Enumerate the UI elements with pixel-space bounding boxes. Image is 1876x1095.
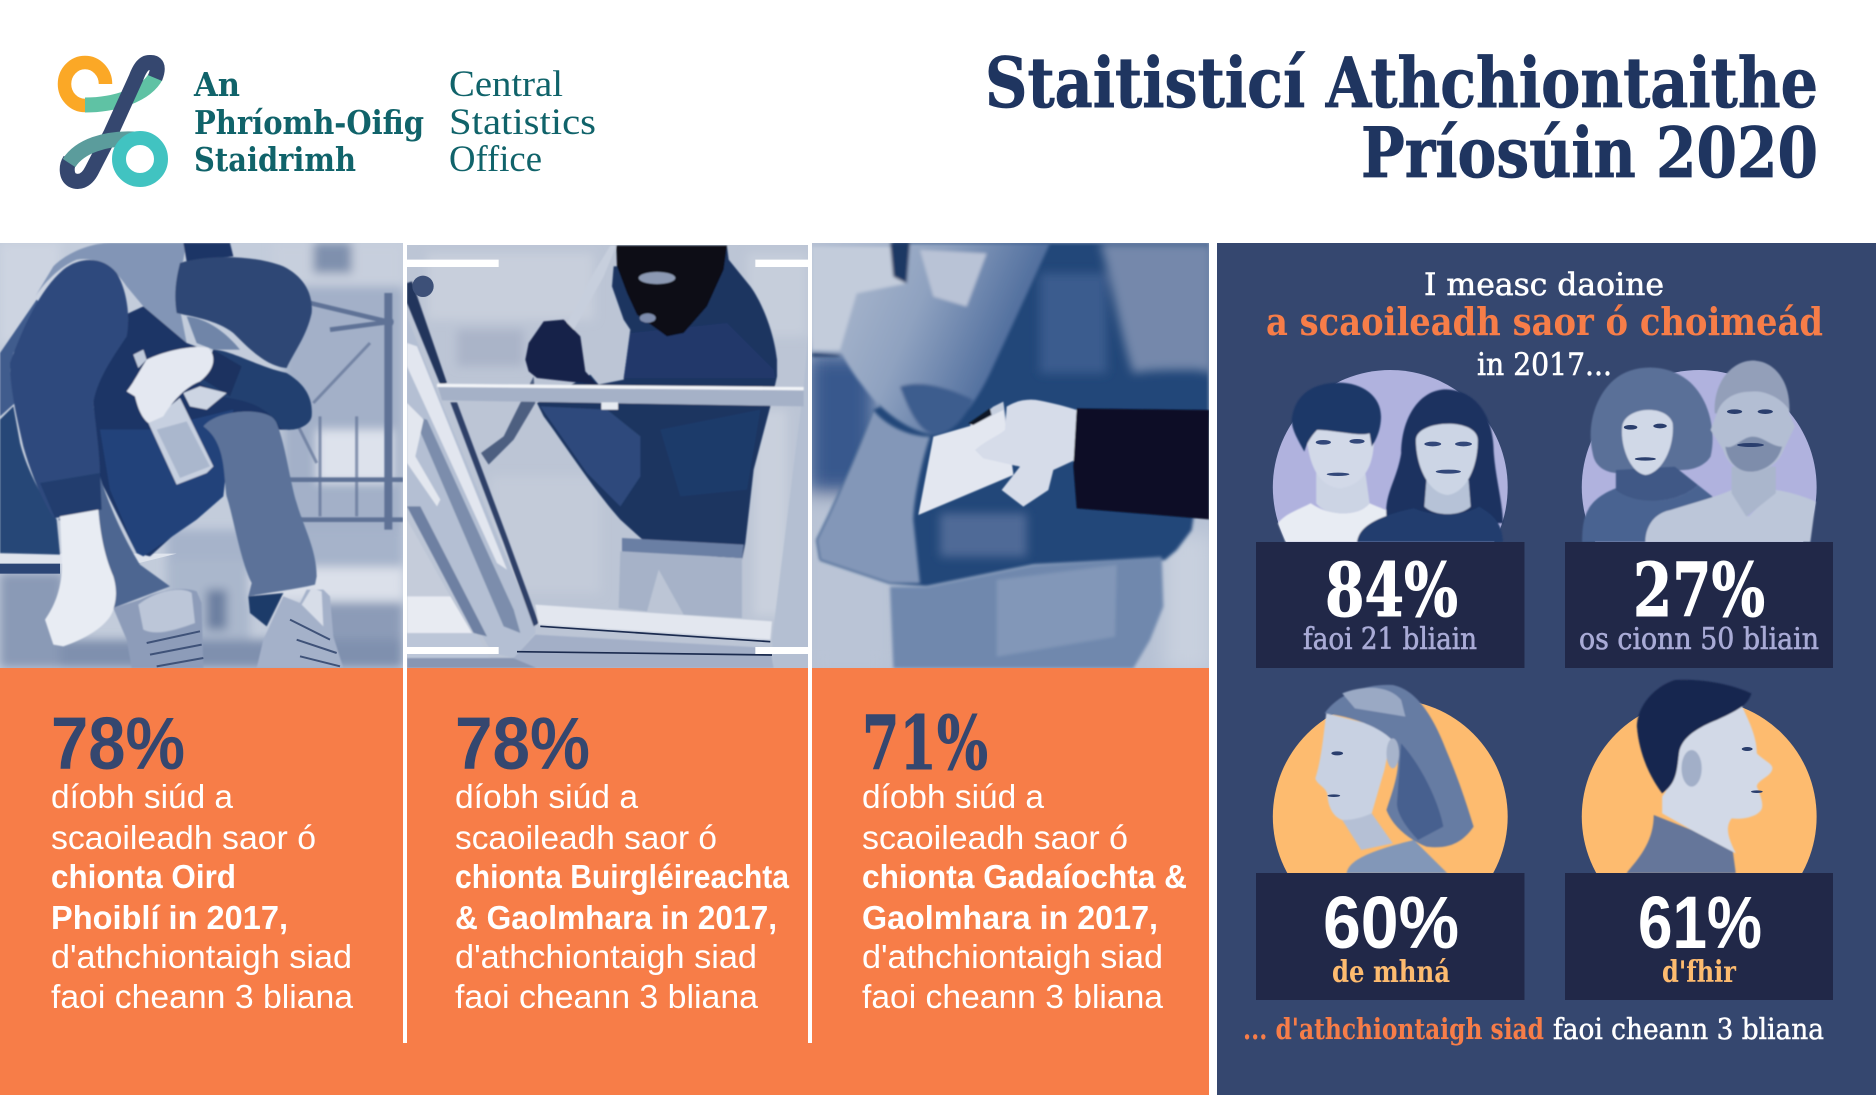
panel heading: a scaoileadh saor ó choimeád [1266,299,1823,344]
panel text: theft offences [862,701,1187,1015]
stat box: under 21: faoi 21 bliain [1303,622,1477,657]
white bars [407,260,810,654]
panel text: public order offences [51,702,354,1015]
logo text: Irish name: Phríomh-Oifig [194,103,424,142]
stat box: men: d'fhir [1662,955,1737,990]
stat box: over 50: 27% [1633,548,1765,634]
panel heading [1266,267,1823,383]
panel text: theft offences: 71% [862,701,988,787]
panel text: burglary offences: scaoileadh saor ó [455,819,717,856]
panel heading: in 2017... [1477,347,1612,383]
panel text: public order offences: d'athchiontaigh siad [51,938,352,975]
panel text: public order offences: faoi cheann 3 bliana [51,978,354,1015]
stat box: women: 60% [1323,881,1459,964]
stat box: men [1565,873,1833,1000]
stat box: men: 61% [1638,881,1762,964]
panel: orange statistics background [0,668,1209,1095]
panel text: public order offences: Phoiblí in 2017, [51,899,288,936]
panel text: theft offences: Gaolmhara in 2017, [862,899,1158,936]
photo: hooded person sitting with a bottle [0,243,403,668]
title [985,43,1818,194]
closing line: ... d'athchiontaigh siad [1243,1012,1544,1046]
logo text: English name: Central [449,64,563,105]
panel text: burglary offences: díobh siúd a [455,778,639,815]
portrait: older woman and older man [1582,361,1817,605]
panel text: theft offences: d'athchiontaigh siad [862,938,1163,975]
portrait: young man and young woman [1273,370,1508,605]
logo: Central Statistics Office [64,62,596,181]
divider lines [405,668,810,1043]
logo text: Irish name: Staidrimh [194,140,356,179]
stat box: over 50: os cionn 50 bliain [1579,622,1819,657]
panel text: public order offences: scaoileadh saor ó [51,819,316,856]
panel text: burglary offences: faoi cheann 3 bliana [455,978,759,1015]
panel text: public order offences: 78% [51,702,185,785]
portrait: woman in profile [1273,685,1508,934]
panel text: theft offences: díobh siúd a [862,778,1045,815]
closing line [1243,1012,1824,1046]
logo text: Irish name: An [193,65,240,104]
panel text: public order offences: chionta Oird [51,858,236,895]
portrait: man in profile [1582,680,1817,934]
stat box: under 21: 84% [1325,548,1458,634]
panel text: burglary offences [455,702,790,1015]
panel text: burglary offences: & Gaolmhara in 2017, [455,899,777,936]
panel text: theft offences: faoi cheann 3 bliana [862,978,1164,1015]
logo text: English name: Office [449,139,542,180]
panel text: public order offences: díobh siúd a [51,778,234,815]
panel heading: I measc daoine [1424,267,1664,303]
panel text: burglary offences: 78% [455,702,590,785]
logo text: English name [449,64,596,180]
photo: masked burglar at a window [407,243,810,668]
stat box: women [1256,873,1524,1000]
photo: pickpocket taking a phone from a jacket pocket [807,240,1213,673]
panel text: burglary offences: d'athchiontaigh siad [455,938,757,975]
panel text: theft offences: chionta Gadaíochta & [862,858,1187,895]
stat box: under 21 [1256,542,1524,668]
stat box: women: de mhná [1332,955,1450,990]
closing line: faoi cheann 3 bliana [1553,1012,1824,1046]
panel: demographics [1217,243,1876,1095]
panel text: theft offences: scaoileadh saor ó [862,819,1128,856]
logo text: English name: Statistics [449,102,596,143]
stat box: over 50 [1565,542,1833,668]
logo text: Irish name [193,65,424,179]
panel text: burglary offences: chionta Buirgléireachta [455,858,790,895]
icon: knot logo mark [64,62,161,181]
